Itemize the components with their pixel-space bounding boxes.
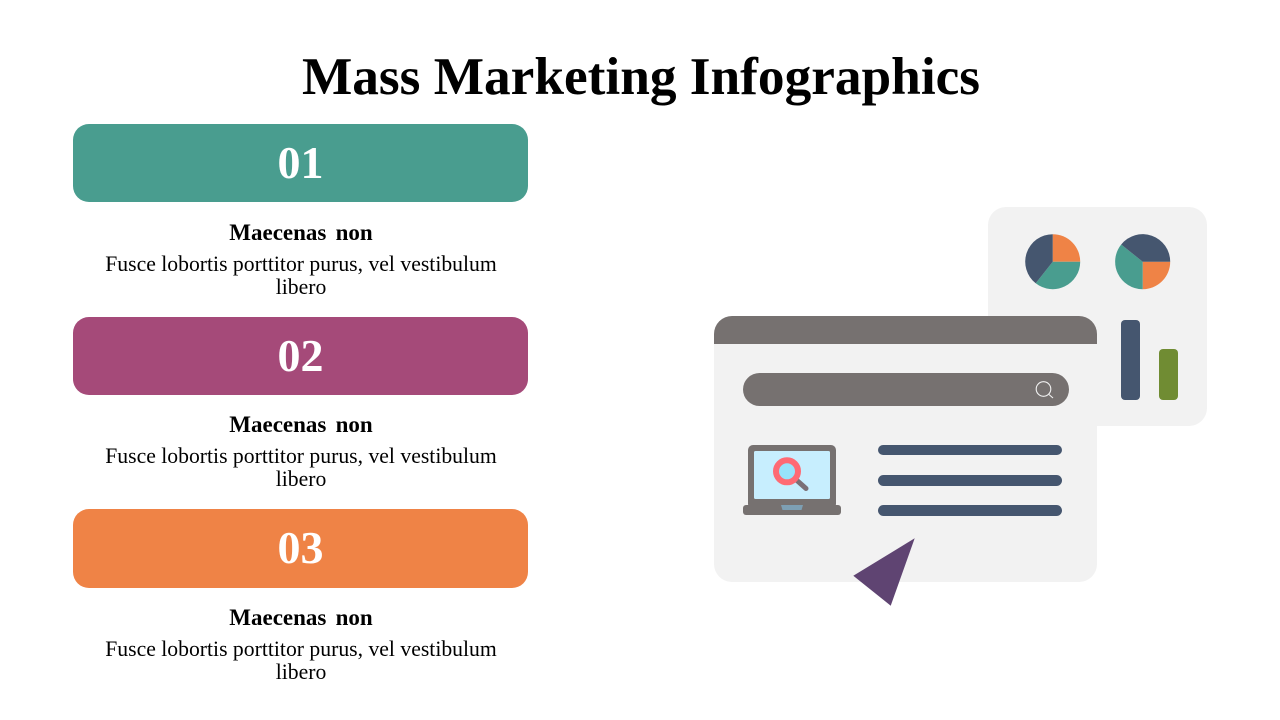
panel: step 02 banner (73, 317, 528, 395)
text block: step 03: Fusce lobortis porttitor purus, vel vestibulum (105, 637, 497, 661)
icon: cursor arrow (853, 538, 915, 606)
bar: olive column (1159, 349, 1178, 400)
search field (743, 373, 1069, 406)
bar: navy column (1121, 320, 1140, 400)
icon: laptop with magnifier (743, 445, 841, 515)
text block: step 01: libero (276, 275, 326, 299)
text block: step 02: libero (276, 467, 326, 491)
panel: charts card (988, 207, 1207, 426)
icon: pie chart left (1025, 234, 1080, 289)
text block: step 01: Fusce lobortis porttitor purus, vel vestibulum (105, 252, 497, 276)
text block: step 01: Maecenas non (229, 220, 373, 245)
title: Mass Marketing Infographics (302, 47, 980, 106)
icon: pie chart right (1115, 234, 1170, 289)
text block: step 01 (105, 220, 497, 299)
panel: step 03 banner: 03 (278, 522, 324, 573)
text block: step 02: Fusce lobortis porttitor purus, vel vestibulum (105, 444, 497, 468)
icon: search glass (1036, 382, 1053, 398)
panel: step 01 banner: 01 (278, 137, 324, 188)
text block: step 02: Maecenas non (229, 412, 373, 437)
panel: step 02 banner: 02 (278, 330, 324, 381)
text block: step 03: libero (276, 660, 326, 684)
panel: step 03 banner (73, 509, 528, 588)
panel: browser window (714, 316, 1097, 582)
text block: step 03 (105, 605, 497, 684)
text block: step 03: Maecenas non (229, 605, 373, 630)
browser title bar (714, 316, 1097, 344)
panel: step 01 banner (73, 124, 528, 202)
text lines placeholder (878, 445, 1062, 516)
text block: step 02 (105, 412, 497, 491)
